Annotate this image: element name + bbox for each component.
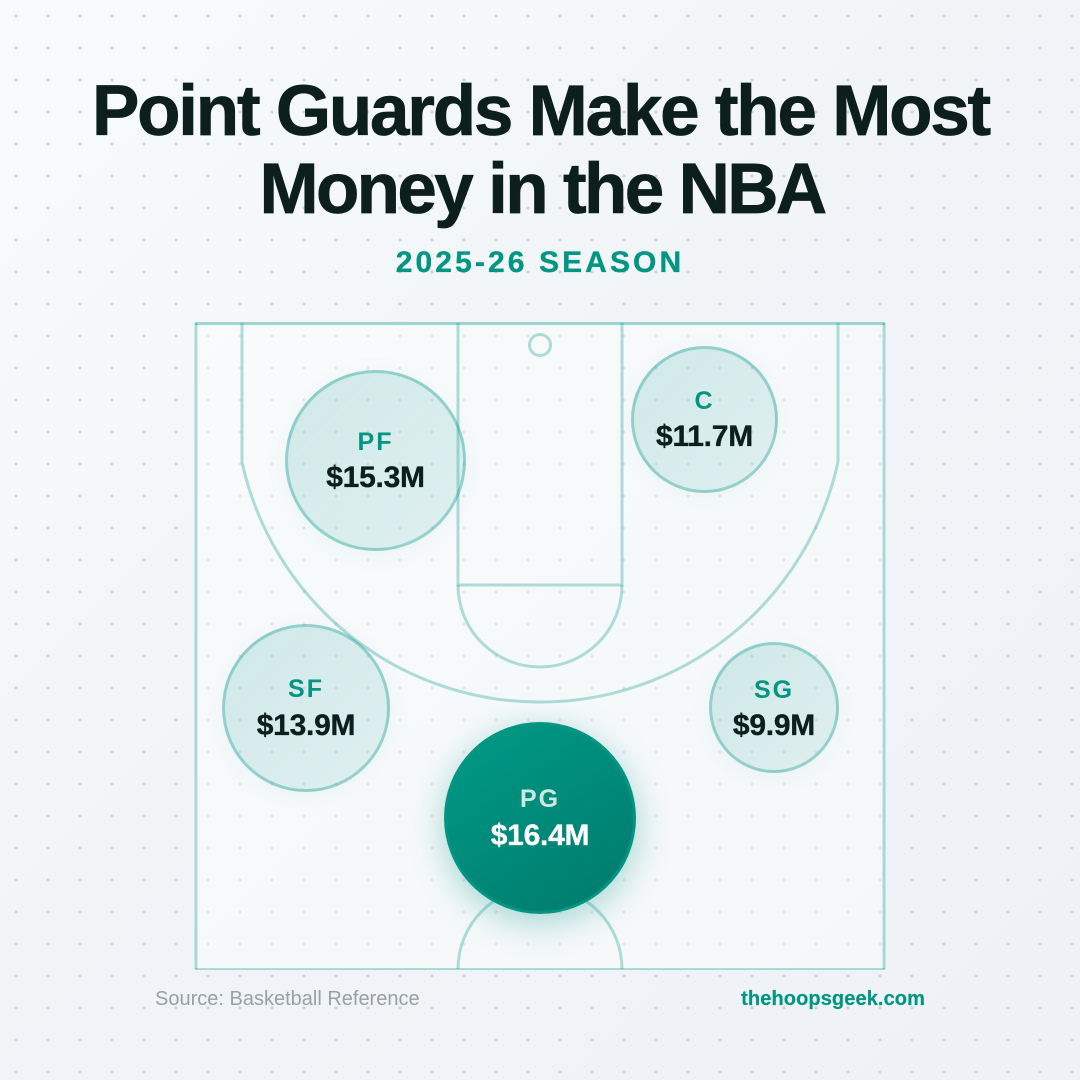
title [92, 72, 991, 228]
bubble: small forward: SF [288, 675, 324, 703]
subtitle: 2025-26 SEASON [396, 246, 684, 279]
source note: Source: Basketball Reference [155, 988, 420, 1010]
bubble: small forward: $13.9M [257, 709, 355, 742]
bubble: power forward: PF [358, 428, 393, 456]
bubble: point guard: $16.4M [491, 819, 589, 852]
bubble: small forward [222, 624, 390, 792]
bubble: center: C [694, 387, 715, 415]
bubble: shooting guard [709, 642, 839, 773]
title: Money in the NBA [259, 150, 825, 228]
bubble: shooting guard: SG [754, 676, 794, 704]
website credit: thehoopsgeek.com [741, 988, 925, 1010]
bubble: shooting guard: $9.9M [733, 709, 815, 742]
bubble: center [631, 346, 778, 493]
bubble: power forward [285, 370, 466, 551]
bubble: center: $11.7M [656, 420, 753, 453]
bubble: power forward: $15.3M [326, 461, 425, 494]
bubble: point guard [444, 722, 636, 914]
title: Point Guards Make the Most [92, 72, 989, 150]
bubble: point guard: PG [520, 785, 560, 813]
